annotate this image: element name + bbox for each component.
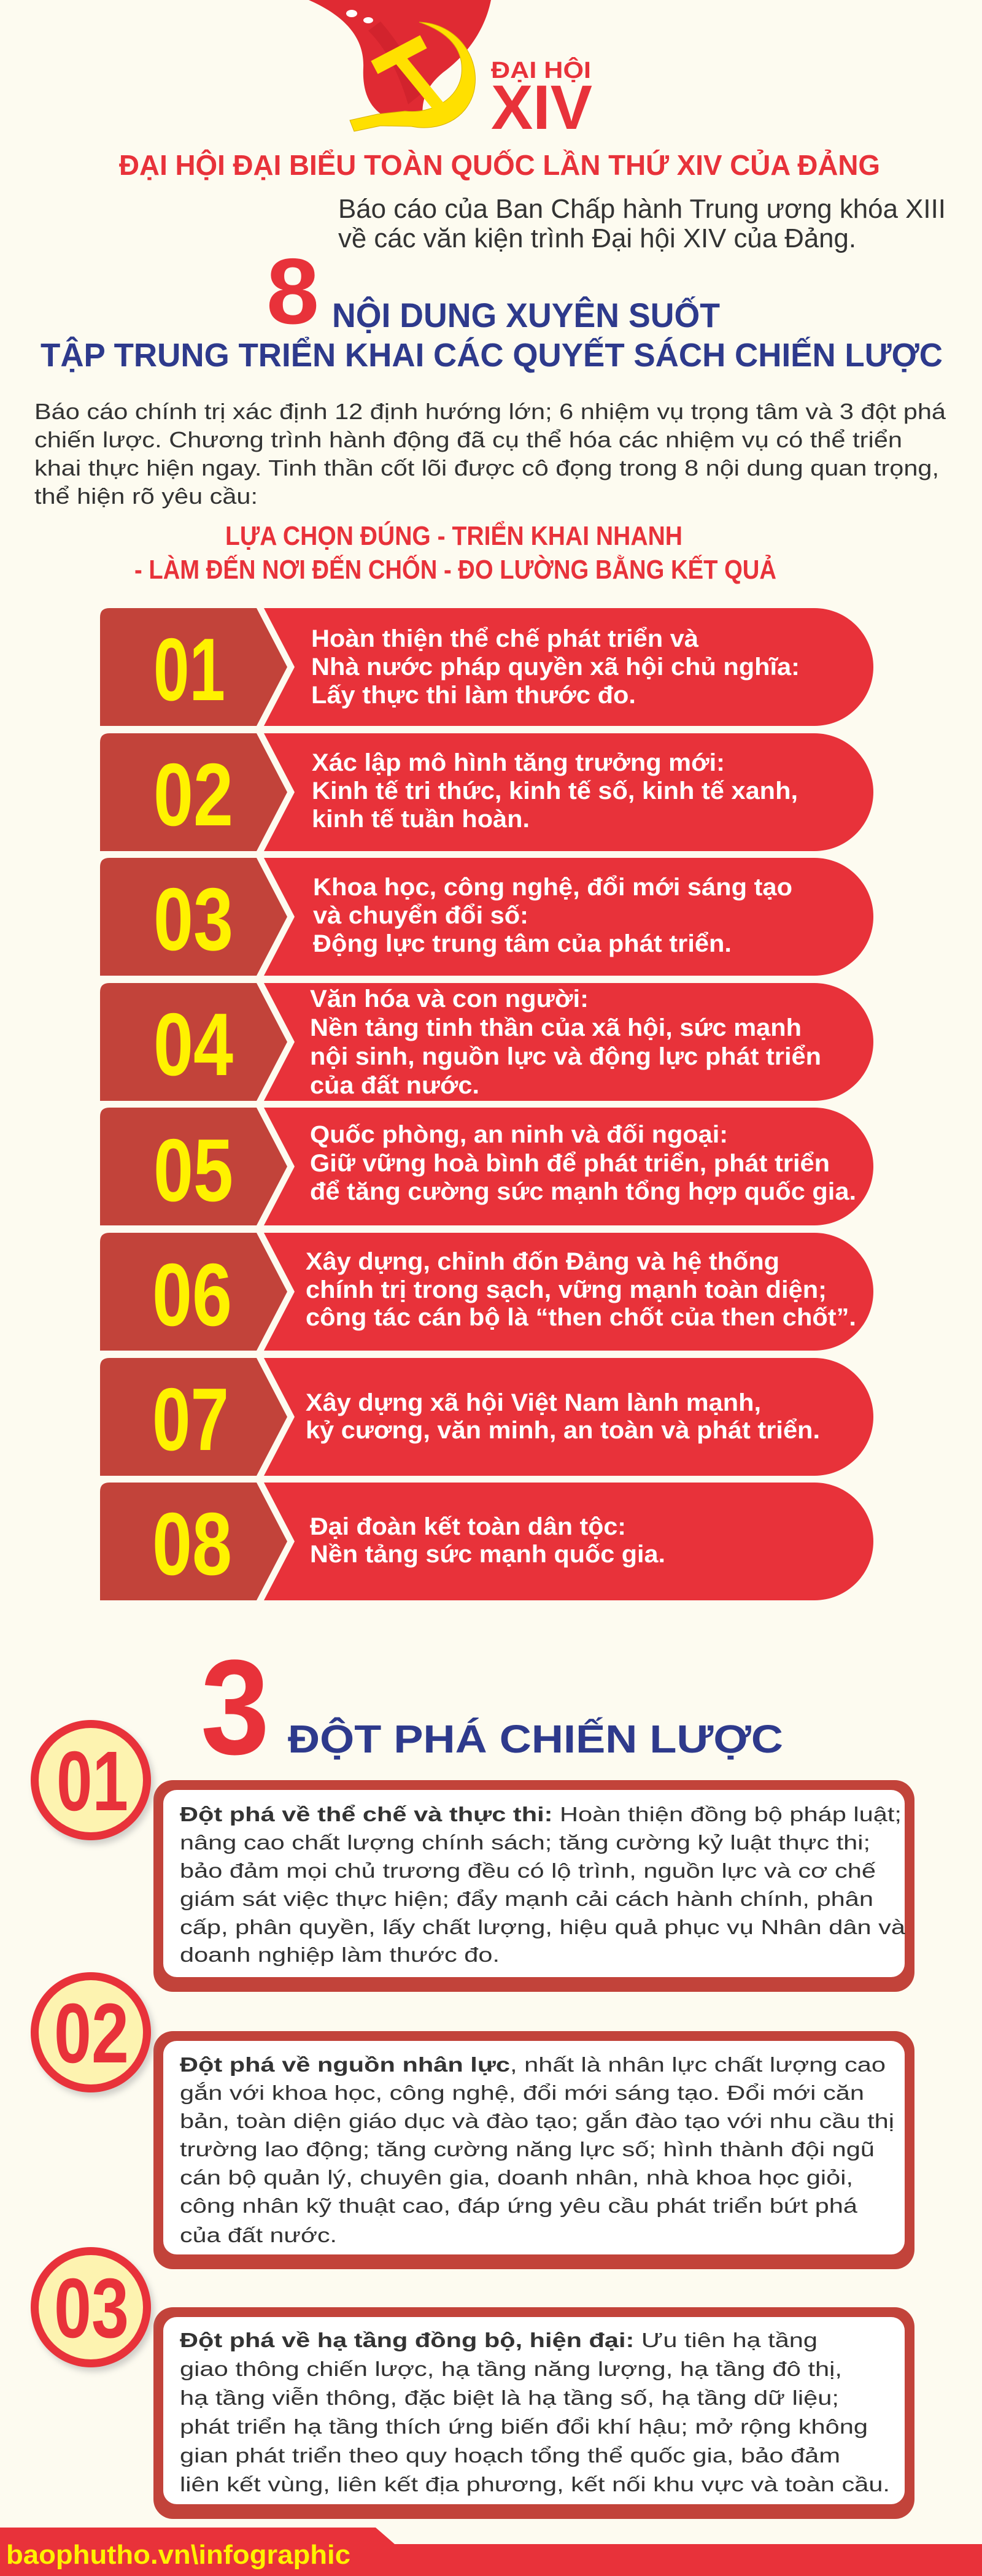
slogan: LỰA CHỌN ĐÚNG - TRIỂN KHAI NHANH	[225, 520, 682, 551]
card 02: kinh tế tuần hoàn.	[312, 806, 530, 833]
panel: breakthrough 01 box: nâng cao chất lượng chính sách; tăng cường kỷ luật thực thi;	[180, 1831, 870, 1854]
card 06: chính trị trong sạch, vững mạnh toàn diện;	[306, 1276, 827, 1303]
footer bar with source	[0, 2528, 982, 2576]
card 01: Lấy thực thi làm thước đo.	[311, 682, 636, 709]
subtitle: Báo cáo của Ban Chấp hành Trung ương khóa XIII	[338, 194, 946, 224]
heading: 3 đột phá chiến lược: 3	[201, 1632, 269, 1783]
card 01	[100, 608, 873, 726]
panel: breakthrough 02 box: cán bộ quản lý, chuyên gia, doanh nhân, nhà khoa học giỏi,	[180, 2166, 853, 2189]
panel: breakthrough 01 box: doanh nghiệp làm thước đo.	[180, 1943, 500, 1966]
intro paragraph: chiến lược. Chương trình hành động đã cụ thể hóa các nhiệm vụ có thể triển	[34, 427, 902, 452]
card 03: 03	[153, 870, 233, 969]
card 07	[100, 1358, 873, 1476]
icon: circle number 03	[31, 2247, 154, 2372]
card 02: 02	[153, 745, 233, 844]
card 08	[100, 1483, 873, 1600]
card 06: công tác cán bộ là “then chốt của then chốt”.	[306, 1304, 856, 1331]
card 02	[100, 733, 873, 851]
card 05: 05	[153, 1120, 233, 1220]
subtitle: về các văn kiện trình Đại hội XIV của Đảng.	[338, 223, 856, 253]
heading: 3 đột phá chiến lược: ĐỘT PHÁ CHIẾN LƯỢC	[288, 1716, 783, 1761]
card 03	[100, 858, 873, 976]
card 04: 04	[153, 995, 233, 1094]
icon: circle number 03: 03	[54, 2261, 129, 2356]
card 08: Nền tảng sức mạnh quốc gia.	[310, 1541, 665, 1568]
logo text: ĐẠI HỘI XIV: ĐẠI HỘI	[491, 56, 591, 83]
card 02: Xác lập mô hình tăng trưởng mới:	[312, 749, 725, 776]
card 03: Khoa học, công nghệ, đổi mới sáng tạo	[313, 874, 792, 901]
slogan: - LÀM ĐẾN NƠI ĐẾN CHỐN - ĐO LƯỜNG BẰNG KẾT QUẢ	[134, 553, 776, 585]
panel: breakthrough 01 box: giám sát việc thực hiện; đẩy mạnh cải cách hành chính, phân	[180, 1888, 873, 1910]
heading: 8 nội dung xuyên suốt	[41, 239, 943, 374]
heading: 3 đột phá chiến lược	[201, 1632, 783, 1783]
panel: breakthrough 01 box	[153, 1780, 914, 1992]
card 08: Đại đoàn kết toàn dân tộc:	[310, 1513, 626, 1540]
panel: breakthrough 03 box	[153, 2307, 914, 2519]
card 01: Nhà nước pháp quyền xã hội chủ nghĩa:	[311, 654, 800, 681]
panel: breakthrough 01 box: bảo đảm mọi chủ trương đều có lộ trình, nguồn lực và cơ chế	[180, 1859, 876, 1882]
card 05: Quốc phòng, an ninh và đối ngoại:	[310, 1121, 728, 1148]
slogan	[134, 520, 776, 585]
card 04: nội sinh, nguồn lực và động lực phát triển	[310, 1043, 821, 1070]
footer bar with source: baophutho.vn\infographic	[6, 2540, 350, 2570]
card 04: Nền tảng tinh thần của xã hội, sức mạnh	[310, 1014, 802, 1041]
icon: circle number 02: 02	[54, 1986, 129, 2081]
panel: breakthrough 02 box: bản, toàn diện giáo dục và đào tạo; gắn đào tạo với nhu cầu thị	[180, 2110, 894, 2132]
card 03: và chuyển đổi số:	[313, 902, 528, 929]
heading: 8 nội dung xuyên suốt: 8	[266, 239, 319, 344]
card 07: Xây dựng xã hội Việt Nam lành mạnh,	[306, 1389, 761, 1416]
heading: 8 nội dung xuyên suốt: TẬP TRUNG TRIỂN KHAI CÁC QUYẾT SÁCH CHIẾN LƯỢC	[41, 336, 943, 374]
card 02: Kinh tế tri thức, kinh tế số, kinh tế xanh,	[312, 777, 798, 804]
intro paragraph: Báo cáo chính trị xác định 12 định hướng lớn; 6 nhiệm vụ trọng tâm và 3 đột phá	[34, 399, 946, 424]
logo text: ĐẠI HỘI XIV: XIV	[491, 72, 592, 142]
title: ĐẠI HỘI ĐẠI BIỂU TOÀN QUỐC LẦN THỨ XIV CỦA ĐẢNG	[119, 149, 880, 181]
card 06	[100, 1233, 873, 1351]
panel: breakthrough 02 box: trường lao động; tăng cường năng lực số; hình thành đội ngũ	[180, 2138, 875, 2161]
panel: breakthrough 02 box: của đất nước.	[180, 2224, 337, 2246]
card 07: kỷ cương, văn minh, an toàn và phát triển.	[306, 1417, 820, 1444]
icon: circle number 01: 01	[56, 1734, 128, 1829]
card 07: 07	[152, 1370, 229, 1469]
card 05: để tăng cường sức mạnh tổng hợp quốc gia.	[310, 1178, 856, 1205]
panel: breakthrough 02 box: công nhân kỹ thuật cao, đáp ứng yêu cầu phát triển bứt phá	[180, 2194, 858, 2217]
intro paragraph	[34, 399, 946, 509]
panel: breakthrough 03 box: liên kết vùng, liên kết địa phương, kết nối khu vực và toàn cầu.	[180, 2473, 890, 2496]
heading: 8 nội dung xuyên suốt: NỘI DUNG XUYÊN SUỐT	[332, 296, 720, 334]
card 04	[100, 983, 873, 1101]
icon: circle number 02	[31, 1972, 154, 2097]
intro paragraph: khai thực hiện ngay. Tinh thần cốt lõi được cô đọng trong 8 nội dung quan trọng,	[34, 455, 939, 480]
card 06: 06	[152, 1245, 232, 1344]
panel: breakthrough 02 box: Đột phá về nguồn nhân lực , nhất là nhân lực chất lượng cao	[180, 2053, 886, 2076]
card 05: Giữ vững hoà bình để phát triển, phát triển	[310, 1150, 830, 1177]
panel: breakthrough 03 box: giao thông chiến lược, hạ tầng năng lượng, hạ tầng đô thị,	[180, 2358, 842, 2380]
card 05	[100, 1108, 873, 1225]
panel: breakthrough 02 box	[153, 2031, 914, 2269]
card 04: Văn hóa và con người:	[310, 985, 589, 1012]
card 08: 08	[152, 1494, 232, 1594]
icon: circle number 01	[31, 1720, 154, 1845]
card 01: 01	[153, 620, 225, 719]
card 06: Xây dựng, chỉnh đốn Đảng và hệ thống	[306, 1248, 779, 1275]
card 03: Động lực trung tâm của phát triển.	[313, 930, 732, 957]
panel: breakthrough 01 box: cấp, phân quyền, lấy chất lượng, hiệu quả phục vụ Nhân dân và	[180, 1916, 906, 1938]
logo: party flag with hammer and sickle	[309, 0, 491, 131]
subtitle	[338, 194, 946, 253]
panel: breakthrough 02 box: gắn với khoa học, công nghệ, đổi mới sáng tạo. Đổi mới căn	[180, 2081, 864, 2104]
panel: breakthrough 03 box: hạ tầng viễn thông, đặc biệt là hạ tầng số, hạ tầng dữ liệu;	[180, 2386, 839, 2409]
intro paragraph: thể hiện rõ yêu cầu:	[34, 484, 258, 509]
card 04: của đất nước.	[310, 1072, 479, 1099]
panel: breakthrough 03 box: gian phát triển theo quy hoạch tổng thể quốc gia, bảo đảm	[180, 2444, 840, 2467]
panel: breakthrough 01 box: Đột phá về thể chế và thực thi: Hoàn thiện đồng bộ pháp luật;	[180, 1803, 902, 1826]
card 01: Hoàn thiện thể chế phát triển và	[311, 625, 699, 652]
panel: breakthrough 03 box: phát triển hạ tầng thích ứng biến đổi khí hậu; mở rộng không	[180, 2415, 868, 2438]
panel: breakthrough 03 box: Đột phá về hạ tầng đồng bộ, hiện đại: Ưu tiên hạ tầng	[180, 2329, 818, 2351]
